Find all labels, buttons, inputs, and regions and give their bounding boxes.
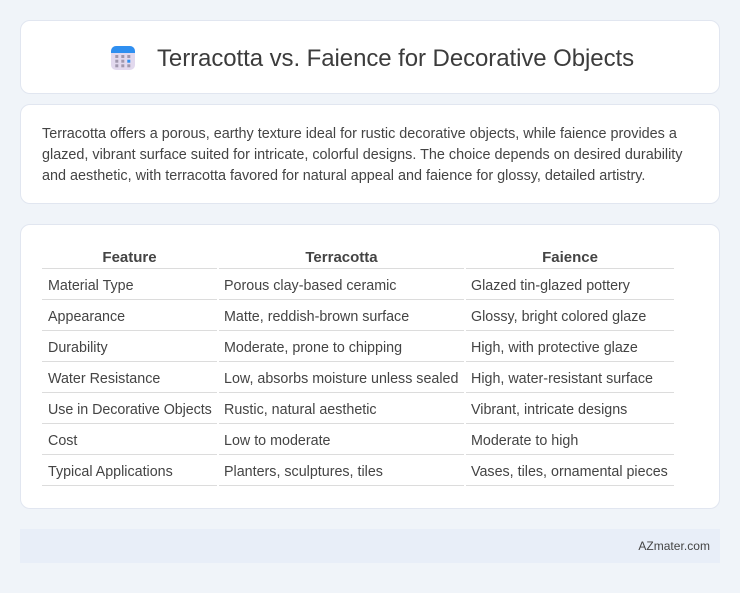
row: Typical Applications: Typical Applications xyxy=(48,464,173,480)
icon: calendar xyxy=(111,46,135,70)
footer credit: AZmater.com xyxy=(638,539,710,553)
row: Material Type: Material Type xyxy=(48,278,134,294)
row: Cost: Low to moderate xyxy=(224,433,330,449)
row: Cost: Moderate to high xyxy=(471,433,578,449)
row: Durability: Moderate, prone to chipping xyxy=(224,340,402,356)
comparison table panel xyxy=(20,224,720,509)
row: Material Type: Glazed tin-glazed pottery xyxy=(471,278,630,294)
row: Use in Decorative Objects: Rustic, natural aesthetic xyxy=(224,402,377,418)
row: Use in Decorative Objects: Use in Decorative Objects xyxy=(48,402,212,418)
row: Water Resistance xyxy=(42,371,674,393)
row: Use in Decorative Objects xyxy=(42,402,674,424)
row: Typical Applications xyxy=(42,464,674,486)
intro text: Terracotta offers a porous, earthy texture ideal for rustic decorative objects, while faience provides a xyxy=(42,126,677,142)
row: Water Resistance: Low, absorbs moisture unless sealed xyxy=(224,371,458,387)
intro text: and aesthetic, with terracotta favored for natural appeal and faience for glossy, detailed artistry. xyxy=(42,168,645,184)
intro text xyxy=(42,126,682,184)
title: Terracotta vs. Faience for Decorative Objects xyxy=(157,45,634,72)
row: Typical Applications: Planters, sculptures, tiles xyxy=(224,464,383,480)
intro text: glazed, vibrant surface suited for intricate, colorful designs. The choice depends on desired durability xyxy=(42,147,682,163)
intro text panel xyxy=(20,104,720,204)
row: Appearance xyxy=(42,309,674,331)
header row: Faience xyxy=(542,249,598,266)
row: Appearance: Matte, reddish-brown surface xyxy=(224,309,409,325)
row: Appearance: Appearance xyxy=(48,309,125,325)
row: Cost xyxy=(42,433,674,455)
footer bar xyxy=(20,529,720,563)
header row: Feature xyxy=(102,249,157,266)
row: Water Resistance: High, water-resistant surface xyxy=(471,371,653,387)
row: Water Resistance: Water Resistance xyxy=(48,371,160,387)
title card xyxy=(20,20,720,94)
row: Material Type xyxy=(42,278,674,300)
header row xyxy=(42,249,674,269)
row: Cost: Cost xyxy=(48,433,77,449)
header row: Terracotta xyxy=(305,249,378,266)
row: Use in Decorative Objects: Vibrant, intricate designs xyxy=(471,402,627,418)
row: Typical Applications: Vases, tiles, ornamental pieces xyxy=(471,464,668,480)
row: Appearance: Glossy, bright colored glaze xyxy=(471,309,646,325)
row: Durability: Durability xyxy=(48,340,108,356)
row: Durability: High, with protective glaze xyxy=(471,340,638,356)
row: Material Type: Porous clay-based ceramic xyxy=(224,278,396,294)
row: Durability xyxy=(42,340,674,362)
